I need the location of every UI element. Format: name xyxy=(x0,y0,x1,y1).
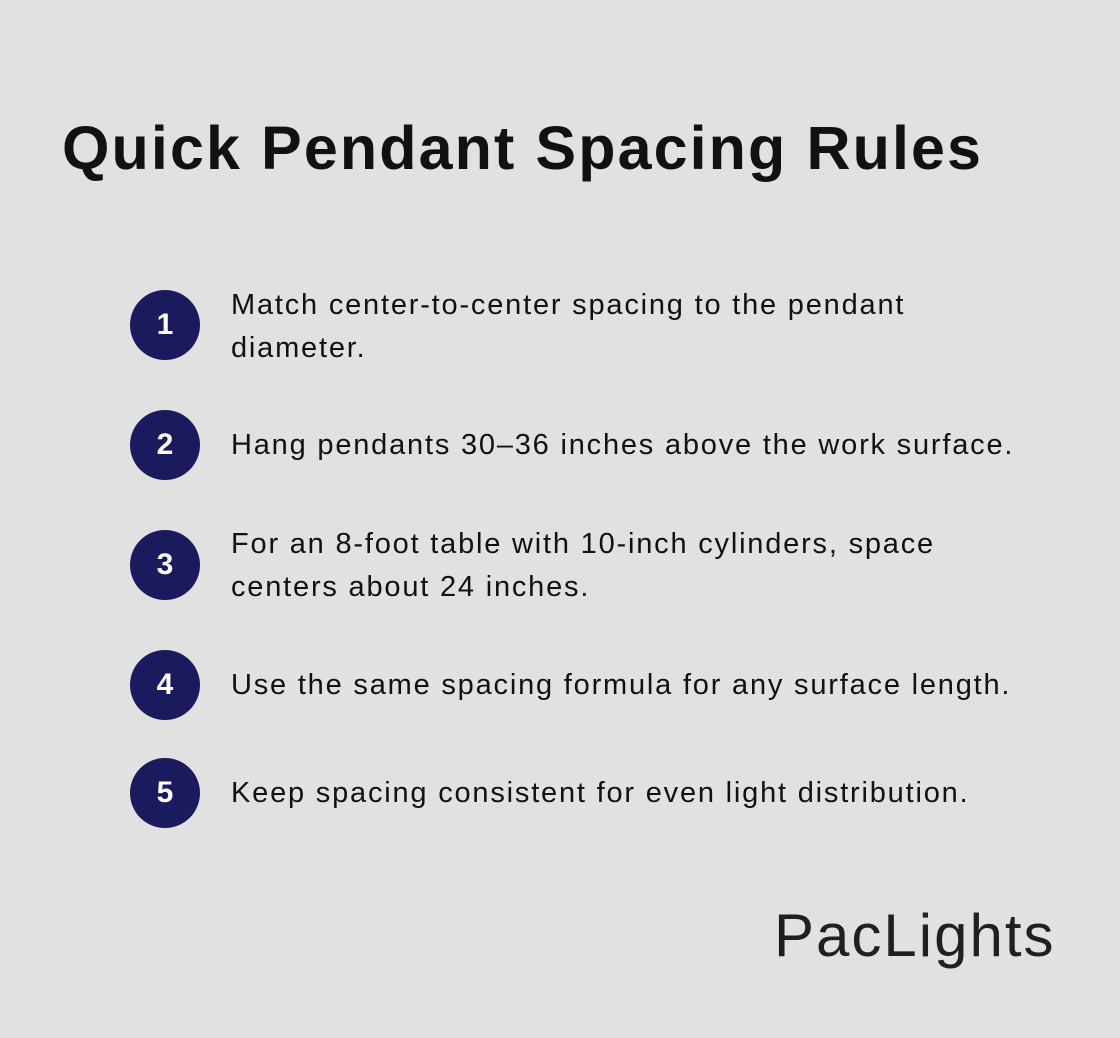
title: Quick Pendant Spacing Rules xyxy=(62,114,983,182)
text: rule 3: centers about 24 inches. xyxy=(231,571,590,603)
icon: number 3 xyxy=(130,530,200,600)
rule 4 xyxy=(130,650,1011,720)
text: rule 1: diameter. xyxy=(231,332,366,364)
icon: number 5 xyxy=(130,758,200,828)
text: rule 3 xyxy=(231,528,935,603)
icon: number 1 xyxy=(130,290,200,360)
text: rule 1 xyxy=(231,289,905,364)
rule 5 xyxy=(130,758,969,828)
text: rule 4: Use the same spacing formula for any surface length. xyxy=(231,669,1011,701)
icon: number 1: 1 xyxy=(157,308,173,341)
logo: PacLights: PacLights xyxy=(774,902,1056,969)
icon: number 2 xyxy=(130,410,200,480)
icon: number 3: 3 xyxy=(157,548,173,581)
icon: number 4 xyxy=(130,650,200,720)
icon: number 4: 4 xyxy=(157,668,173,701)
text: rule 5: Keep spacing consistent for even light distribution. xyxy=(231,777,969,809)
icon: number 2: 2 xyxy=(157,428,173,461)
icon: number 5: 5 xyxy=(157,776,173,809)
rule 2 xyxy=(130,410,1014,480)
text: rule 1: Match center-to-center spacing to the pendant xyxy=(231,289,905,321)
rule 3 xyxy=(130,528,935,603)
rule 1 xyxy=(130,289,905,364)
text: rule 3: For an 8-foot table with 10-inch cylinders, space xyxy=(231,528,935,560)
text: rule 2: Hang pendants 30–36 inches above the work surface. xyxy=(231,429,1014,461)
